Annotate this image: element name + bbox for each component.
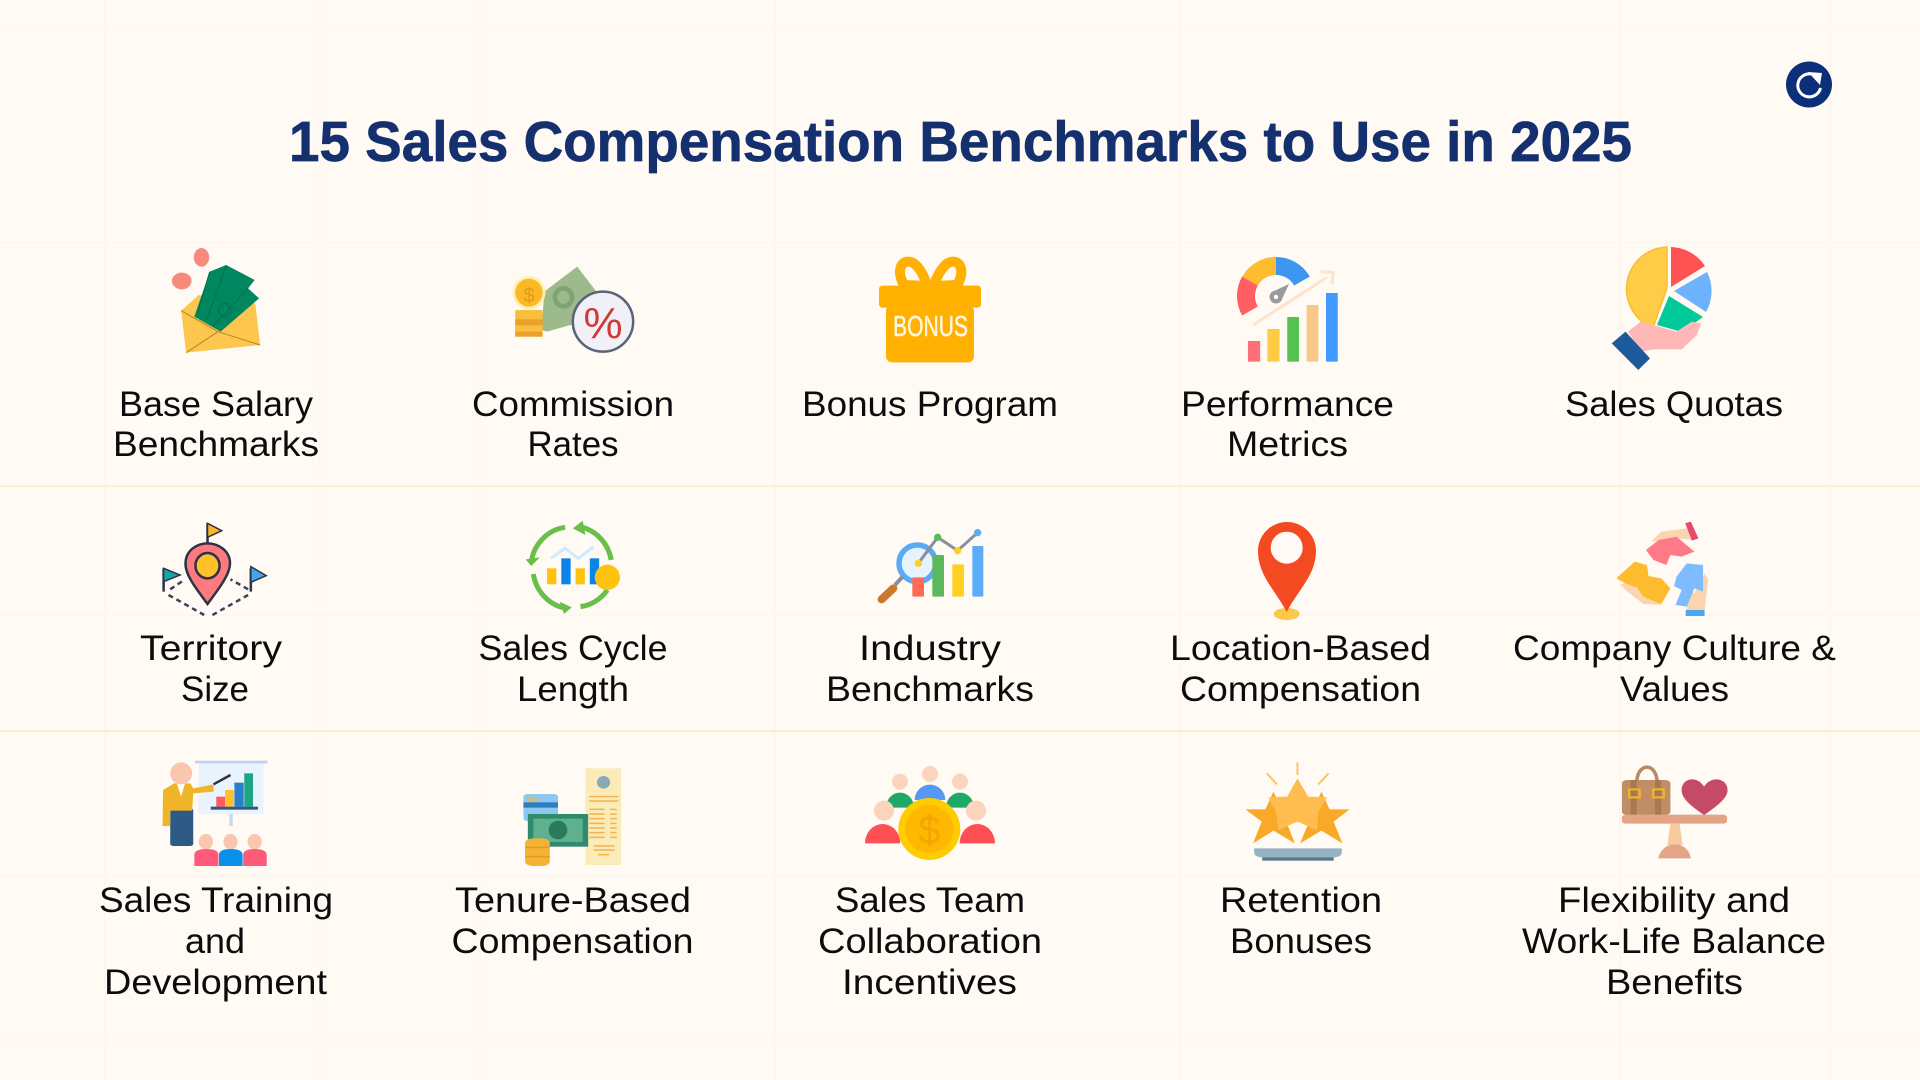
icon: gift box — [879, 262, 981, 362]
label: Performance Metrics — [1181, 385, 1394, 464]
item: Base Salary Benchmarks — [113, 248, 319, 464]
label: Sales Team Collaboration Incentives: Collaboration — [818, 922, 1042, 961]
item: Company Culture & Values — [1513, 522, 1836, 709]
label: Sales Team Collaboration Incentives: Sales Team — [835, 881, 1025, 920]
label: Sales Training and Development: and — [185, 922, 245, 961]
icon: envelope with cash — [172, 248, 260, 353]
label: Territory Size: Size — [181, 670, 249, 709]
icon: gift box: BONUS — [893, 311, 968, 343]
item: Flexibility and Work-Life Balance Benefits — [1522, 767, 1826, 1002]
item: Sales Team Collaboration Incentives — [818, 766, 1042, 1002]
icon: team around coin: $ — [918, 808, 940, 852]
label: Commission Rates — [472, 385, 674, 464]
icon: money and percent: $ — [523, 285, 535, 307]
label: Commission Rates: Rates — [528, 425, 618, 464]
label: Base Salary Benchmarks: Benchmarks — [113, 425, 319, 464]
icon: three stars — [1245, 762, 1349, 861]
label: Company Culture & Values: Company Culture & — [1513, 629, 1836, 668]
item: Bonus Program — [802, 262, 1058, 424]
icon: company logo — [1786, 62, 1832, 108]
label: Flexibility and Work-Life Balance Benefits: Work-Life Balance — [1522, 922, 1826, 961]
label: Tenure-Based Compensation: Compensation — [452, 922, 694, 961]
label: Territory Size — [140, 629, 283, 709]
item: Performance Metrics — [1181, 266, 1394, 464]
icon: location pin — [1258, 522, 1316, 620]
item: Location-Based Compensation — [1170, 522, 1431, 709]
label: Base Salary Benchmarks: Base Salary — [119, 385, 314, 424]
label: Flexibility and Work-Life Balance Benefits: Benefits — [1606, 963, 1743, 1002]
icon: money and percent: % — [583, 299, 623, 348]
label: Retention Bonuses: Bonuses — [1230, 922, 1372, 961]
label: Sales Cycle Length: Length — [517, 670, 629, 709]
label: Bonus Program: Bonus Program — [802, 385, 1058, 424]
title: 15 Sales Compensation Benchmarks to Use in 2025 — [289, 110, 1632, 174]
icon: puzzle pieces and hands — [1616, 522, 1708, 616]
label: Company Culture & Values — [1513, 629, 1836, 709]
icon: cycle arrows with chart — [526, 521, 620, 614]
label: Flexibility and Work-Life Balance Benefits: Flexibility and — [1558, 881, 1790, 920]
icon: gauge and bar chart — [1246, 266, 1338, 362]
label: Commission Rates: Commission — [472, 385, 674, 424]
label: Sales Quotas: Sales Quotas — [1565, 385, 1783, 424]
label: Sales Cycle Length — [478, 629, 668, 709]
label: Sales Training and Development: Sales Training — [99, 881, 333, 920]
label: Retention Bonuses — [1220, 881, 1382, 961]
item: Industry Benchmarks — [826, 529, 1034, 709]
icon: team around coin — [865, 766, 995, 860]
label: Industry Benchmarks: Benchmarks — [826, 670, 1034, 709]
item: Retention Bonuses — [1220, 762, 1382, 961]
label: Sales Training and Development: Development — [104, 963, 327, 1002]
icon: magnifier and bar chart — [882, 529, 983, 599]
item: Sales Quotas — [1565, 247, 1783, 424]
item: Territory Size — [140, 523, 283, 709]
label: Location-Based Compensation — [1170, 629, 1431, 709]
label: Industry Benchmarks — [826, 629, 1034, 709]
label: Performance Metrics: Metrics — [1227, 425, 1348, 464]
icon: hand holding pie chart — [1612, 247, 1712, 370]
label: Tenure-Based Compensation: Tenure-Based — [455, 881, 691, 920]
label: Tenure-Based Compensation — [452, 881, 694, 961]
label: Company Culture & Values: Values — [1620, 670, 1729, 709]
item: Tenure-Based Compensation — [452, 768, 694, 961]
label: Sales Team Collaboration Incentives — [818, 881, 1042, 1002]
label: Territory Size: Territory — [140, 629, 283, 668]
label: Performance Metrics: Performance — [1181, 385, 1394, 424]
label: Sales Team Collaboration Incentives: Incentives — [842, 963, 1017, 1002]
label: Base Salary Benchmarks — [113, 385, 319, 464]
label: Location-Based Compensation: Compensation — [1180, 670, 1421, 709]
icon: presenter and audience — [163, 761, 267, 866]
icon: receipt, card, cash and coins — [523, 768, 621, 866]
item: Sales Training and Development — [99, 761, 333, 1002]
item: Sales Cycle Length — [478, 521, 668, 709]
icon: money and percent — [512, 267, 633, 352]
icon: map pin with flags — [164, 523, 266, 615]
item: Commission Rates — [472, 267, 674, 464]
label: Sales Cycle Length: Sales Cycle — [478, 629, 668, 668]
label: Industry Benchmarks: Industry — [859, 629, 1002, 668]
label: Retention Bonuses: Retention — [1220, 881, 1382, 920]
label: Location-Based Compensation: Location-Based — [1170, 629, 1431, 668]
label: Sales Training and Development — [99, 881, 333, 1002]
icon: balance scale with bag and heart — [1622, 767, 1728, 858]
label: Flexibility and Work-Life Balance Benefits — [1522, 881, 1826, 1002]
